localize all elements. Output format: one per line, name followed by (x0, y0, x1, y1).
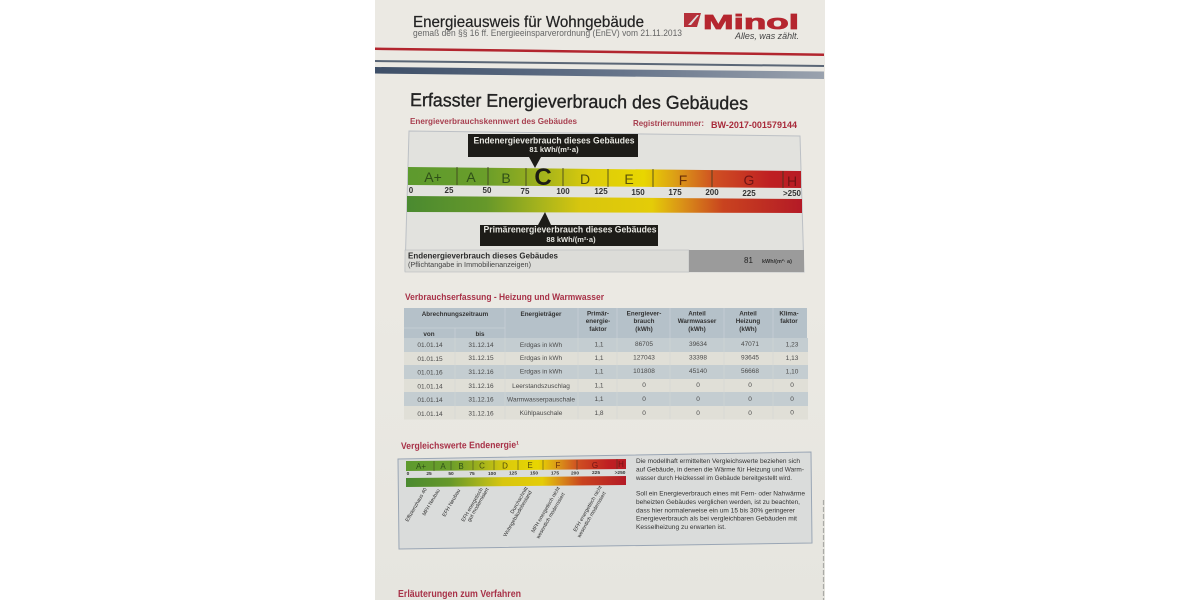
scale numbers: 25 (445, 186, 454, 195)
table rows: 0 (642, 396, 646, 403)
registration number: BW-2017-001579144 (711, 120, 798, 131)
table rows: 0 (748, 382, 752, 389)
table header: Primär- (587, 310, 609, 318)
explanatory text: beheizten Gebäudes verglichen werden, ist zu beachten, (636, 499, 800, 506)
scale numbers: 50 (483, 186, 492, 195)
scale numbers: >250 (783, 189, 802, 198)
table header: Energiever- (627, 310, 661, 318)
small colour scale: C (479, 462, 485, 470)
small scale numbers: 25 (426, 471, 432, 477)
table rows: 01.01.15 (417, 356, 443, 363)
table rows: 1,10 (786, 368, 799, 376)
table rows: 1,1 (594, 355, 604, 362)
table rows: 0 (642, 382, 646, 389)
rotated building type labels: EFH energetisch nicht (573, 484, 604, 533)
table header: Anteil (688, 310, 706, 318)
table rows: 31.12.16 (468, 410, 494, 418)
main heading: Erfasster Energieverbrauch des Gebäudes (410, 89, 748, 114)
colour scale bar: H (787, 173, 797, 189)
table rows: 33398 (689, 354, 707, 362)
table header: (kWh) (688, 326, 706, 333)
small scale numbers: 150 (530, 470, 538, 476)
section heading: comparison values: Vergleichswerte Endenergie¹ (401, 440, 519, 452)
table header: Warmwasser (678, 318, 717, 325)
summary strip: final energy (405, 250, 804, 272)
scale numbers: 175 (668, 188, 682, 197)
small scale numbers: 50 (448, 471, 454, 477)
table rows: 0 (790, 396, 794, 403)
panel: energy scale (405, 131, 804, 272)
small colour scale: A (440, 462, 446, 471)
table rows: 127043 (633, 354, 655, 362)
small colour scale: A+ (416, 462, 426, 471)
rotated building type labels: EFH Neubau (442, 488, 462, 518)
callout: final energy 81 kWh: Endenergieverbrauch dieses Gebäudes (474, 136, 634, 146)
table: consumption data (404, 308, 808, 420)
header: certificate title: gemaß den §§ 16 ff. Energieeinsparverordnung (EnEV) vom 21.11.2013 (413, 28, 682, 39)
small scale numbers: 75 (469, 471, 475, 477)
table rows: 39634 (689, 341, 707, 348)
small scale numbers: 225 (592, 470, 600, 476)
scale numbers: 200 (705, 188, 719, 197)
small colour scale: D (502, 462, 508, 470)
table rows: 0 (642, 410, 646, 417)
logo: Minol: Minol (703, 12, 799, 34)
table header: bis (475, 331, 485, 338)
small colour scale: G (592, 461, 598, 470)
table rows: 1,1 (594, 342, 604, 348)
table rows: 31.12.14 (468, 342, 494, 349)
summary strip: final energy: Endenergieverbrauch dieses Gebäudes (408, 250, 558, 260)
scale numbers: 75 (521, 187, 530, 196)
rotated building type labels: wesentlich modernisiert (577, 491, 608, 539)
callout: primary energy 88 kWh (480, 212, 658, 246)
table rows: 01.01.14 (417, 384, 443, 390)
table header: faktor (780, 318, 798, 325)
table header: (kWh) (635, 326, 653, 333)
table rows: 01.01.16 (417, 370, 443, 376)
margin imprint mark (822, 500, 824, 600)
colour scale bar: G (744, 172, 754, 188)
colour scale bar (408, 164, 801, 191)
small colour scale (406, 459, 626, 471)
small scale numbers: 100 (488, 471, 496, 477)
table rows (404, 338, 808, 420)
table rows: 1,23 (786, 342, 799, 348)
table rows: Kühlpauschale (520, 410, 563, 417)
scale numbers: 125 (594, 187, 608, 196)
summary strip: final energy: 81 (744, 256, 753, 265)
callout: primary energy 88 kWh: Primärenergieverbrauch dieses Gebäudes (484, 224, 656, 236)
table header: von (423, 331, 435, 338)
small primary gradient bar (406, 476, 626, 487)
table rows: 31.12.16 (468, 383, 494, 390)
header stripes (375, 48, 824, 79)
table rows: Erdgas in kWh (520, 355, 563, 362)
scale numbers: 150 (631, 188, 645, 197)
small scale numbers: 125 (509, 470, 517, 476)
primary energy gradient bar (407, 196, 802, 213)
rotated building type labels: Effizienzhaus 40 (405, 487, 429, 523)
explanatory text: Soll ein Energieverbrauch eines mit Fern- oder Nahwärme (636, 490, 805, 498)
scale numbers: 225 (742, 189, 756, 198)
table rows: 31.12.15 (468, 355, 494, 362)
table rows: Erdgas in kWh (520, 368, 563, 376)
small scale numbers: >250 (615, 470, 626, 476)
small scale numbers: 175 (551, 470, 559, 476)
header: certificate title (413, 14, 682, 39)
rotated building type labels: EFH energetisch (461, 487, 485, 523)
colour scale bar: F (679, 172, 687, 188)
table header: faktor (589, 326, 607, 333)
summary strip: final energy: kWh/(m²· a) (762, 258, 792, 265)
callout: primary energy 88 kWh: 88 kWh/(m²·a) (546, 235, 596, 244)
summary strip: final energy: (Pflichtangabe in Immobilienanzeigen) (408, 262, 531, 269)
table header: brauch (634, 318, 655, 325)
table header: Klima- (779, 310, 799, 318)
rotated building type labels: gut modernisiert (467, 487, 491, 523)
table rows: Leerstandszuschlag (512, 383, 570, 390)
explanatory text: Energieverbrauch als bei vergleichbaren Gebäuden mit (636, 516, 797, 522)
small colour scale: H (618, 460, 624, 469)
table rows: 31.12.16 (468, 369, 494, 376)
table rows: 01.01.14 (417, 411, 443, 418)
rotated building type labels: MFH energetisch nicht (531, 485, 562, 534)
scale numbers: 0 (409, 186, 414, 195)
small colour scale: E (527, 461, 533, 470)
explanatory text: dass hier normalerweise ein um 15 bis 30% geringerer (636, 508, 796, 514)
small colour scale: F (556, 461, 561, 470)
table header: Heizung (736, 318, 760, 325)
table header: Anteil (739, 310, 757, 318)
scale numbers: 100 (556, 187, 570, 196)
registration number (633, 118, 798, 131)
table rows: 01.01.14 (417, 397, 443, 404)
table rows: 45140 (689, 368, 707, 375)
table header (404, 308, 807, 338)
table header: (kWh) (739, 326, 757, 333)
table rows: 86705 (635, 341, 653, 348)
table rows: 0 (748, 396, 752, 403)
section heading: method explanation: Erläuterungen zum Verfahren (398, 589, 521, 600)
table rows: 0 (790, 382, 794, 389)
colour scale bar: A+ (424, 169, 442, 185)
table rows: 0 (748, 410, 752, 417)
table rows: Erdgas in kWh (520, 342, 563, 349)
table header: Abrechnungszeitraum (422, 311, 489, 318)
colour scale bar: C (534, 164, 552, 191)
paper sheet (375, 0, 825, 600)
table rows: 0 (696, 382, 700, 389)
small scale numbers (407, 470, 626, 477)
callout: final energy 81 kWh (468, 134, 638, 168)
table rows: 1,1 (594, 382, 604, 390)
rotated building type labels: Durchschnitt (510, 486, 530, 515)
rotated building type labels: Wohngebäudebestand (503, 490, 534, 538)
panel: comparison values (398, 452, 812, 549)
table rows: 01.01.14 (417, 342, 443, 349)
table rows: 0 (696, 410, 700, 417)
table rows: 93645 (741, 354, 759, 362)
callout: final energy 81 kWh: 81 kWh/(m²·a) (529, 145, 579, 154)
section heading: consumption record: Verbrauchserfassung - Heizung und Warmwasser (405, 292, 604, 302)
table rows: 101808 (633, 368, 655, 375)
table header: energie- (586, 318, 610, 325)
registration number: Registriernummer: (633, 118, 704, 128)
table rows: 47071 (741, 341, 759, 348)
table rows: 31.12.16 (468, 396, 494, 404)
colour scale bar: D (580, 171, 590, 187)
table header: Energieträger (521, 311, 562, 318)
small scale numbers: 0 (407, 471, 410, 477)
header: certificate title: Energieausweis für Wohngebäude (413, 14, 644, 31)
small scale numbers: 200 (571, 470, 579, 476)
table rows: 56668 (741, 368, 759, 375)
colour scale bar: B (501, 170, 511, 186)
logo: Minol (684, 12, 799, 41)
explanatory text (635, 458, 805, 531)
explanatory text: auf Gebäude, in denen die Wärme für Heizung und Warm- (636, 466, 804, 474)
explanatory text: Die modellhaft ermittelten Vergleichswerte beziehen sich (636, 458, 800, 465)
table rows: 0 (790, 410, 794, 416)
rotated building type labels: MFH Neubau (422, 488, 442, 517)
small colour scale: B (458, 462, 464, 471)
scale numbers (409, 186, 802, 198)
table rows: 1,1 (594, 396, 604, 403)
table rows: 1,1 (594, 368, 604, 376)
table rows: 1,13 (786, 355, 799, 362)
subheading: energy consumption value: Energieverbrauchskennwert des Gebäudes (410, 116, 577, 126)
explanatory text: wasser durch Heizkessel im Gebäude bereitgestellt wird. (635, 475, 792, 482)
logo: Minol: Alles, was zählt. (734, 31, 799, 41)
rotated building type labels (405, 484, 608, 540)
table rows: Warmwasserpauschale (507, 396, 575, 404)
table rows: 1,8 (594, 410, 604, 417)
explanatory text: Kesselheizung zu erwarten ist. (636, 524, 726, 531)
colour scale bar: A (466, 169, 476, 185)
table rows: 0 (696, 396, 700, 403)
rotated building type labels: wesentlich modernisiert (536, 492, 567, 540)
colour scale bar: E (624, 171, 634, 187)
